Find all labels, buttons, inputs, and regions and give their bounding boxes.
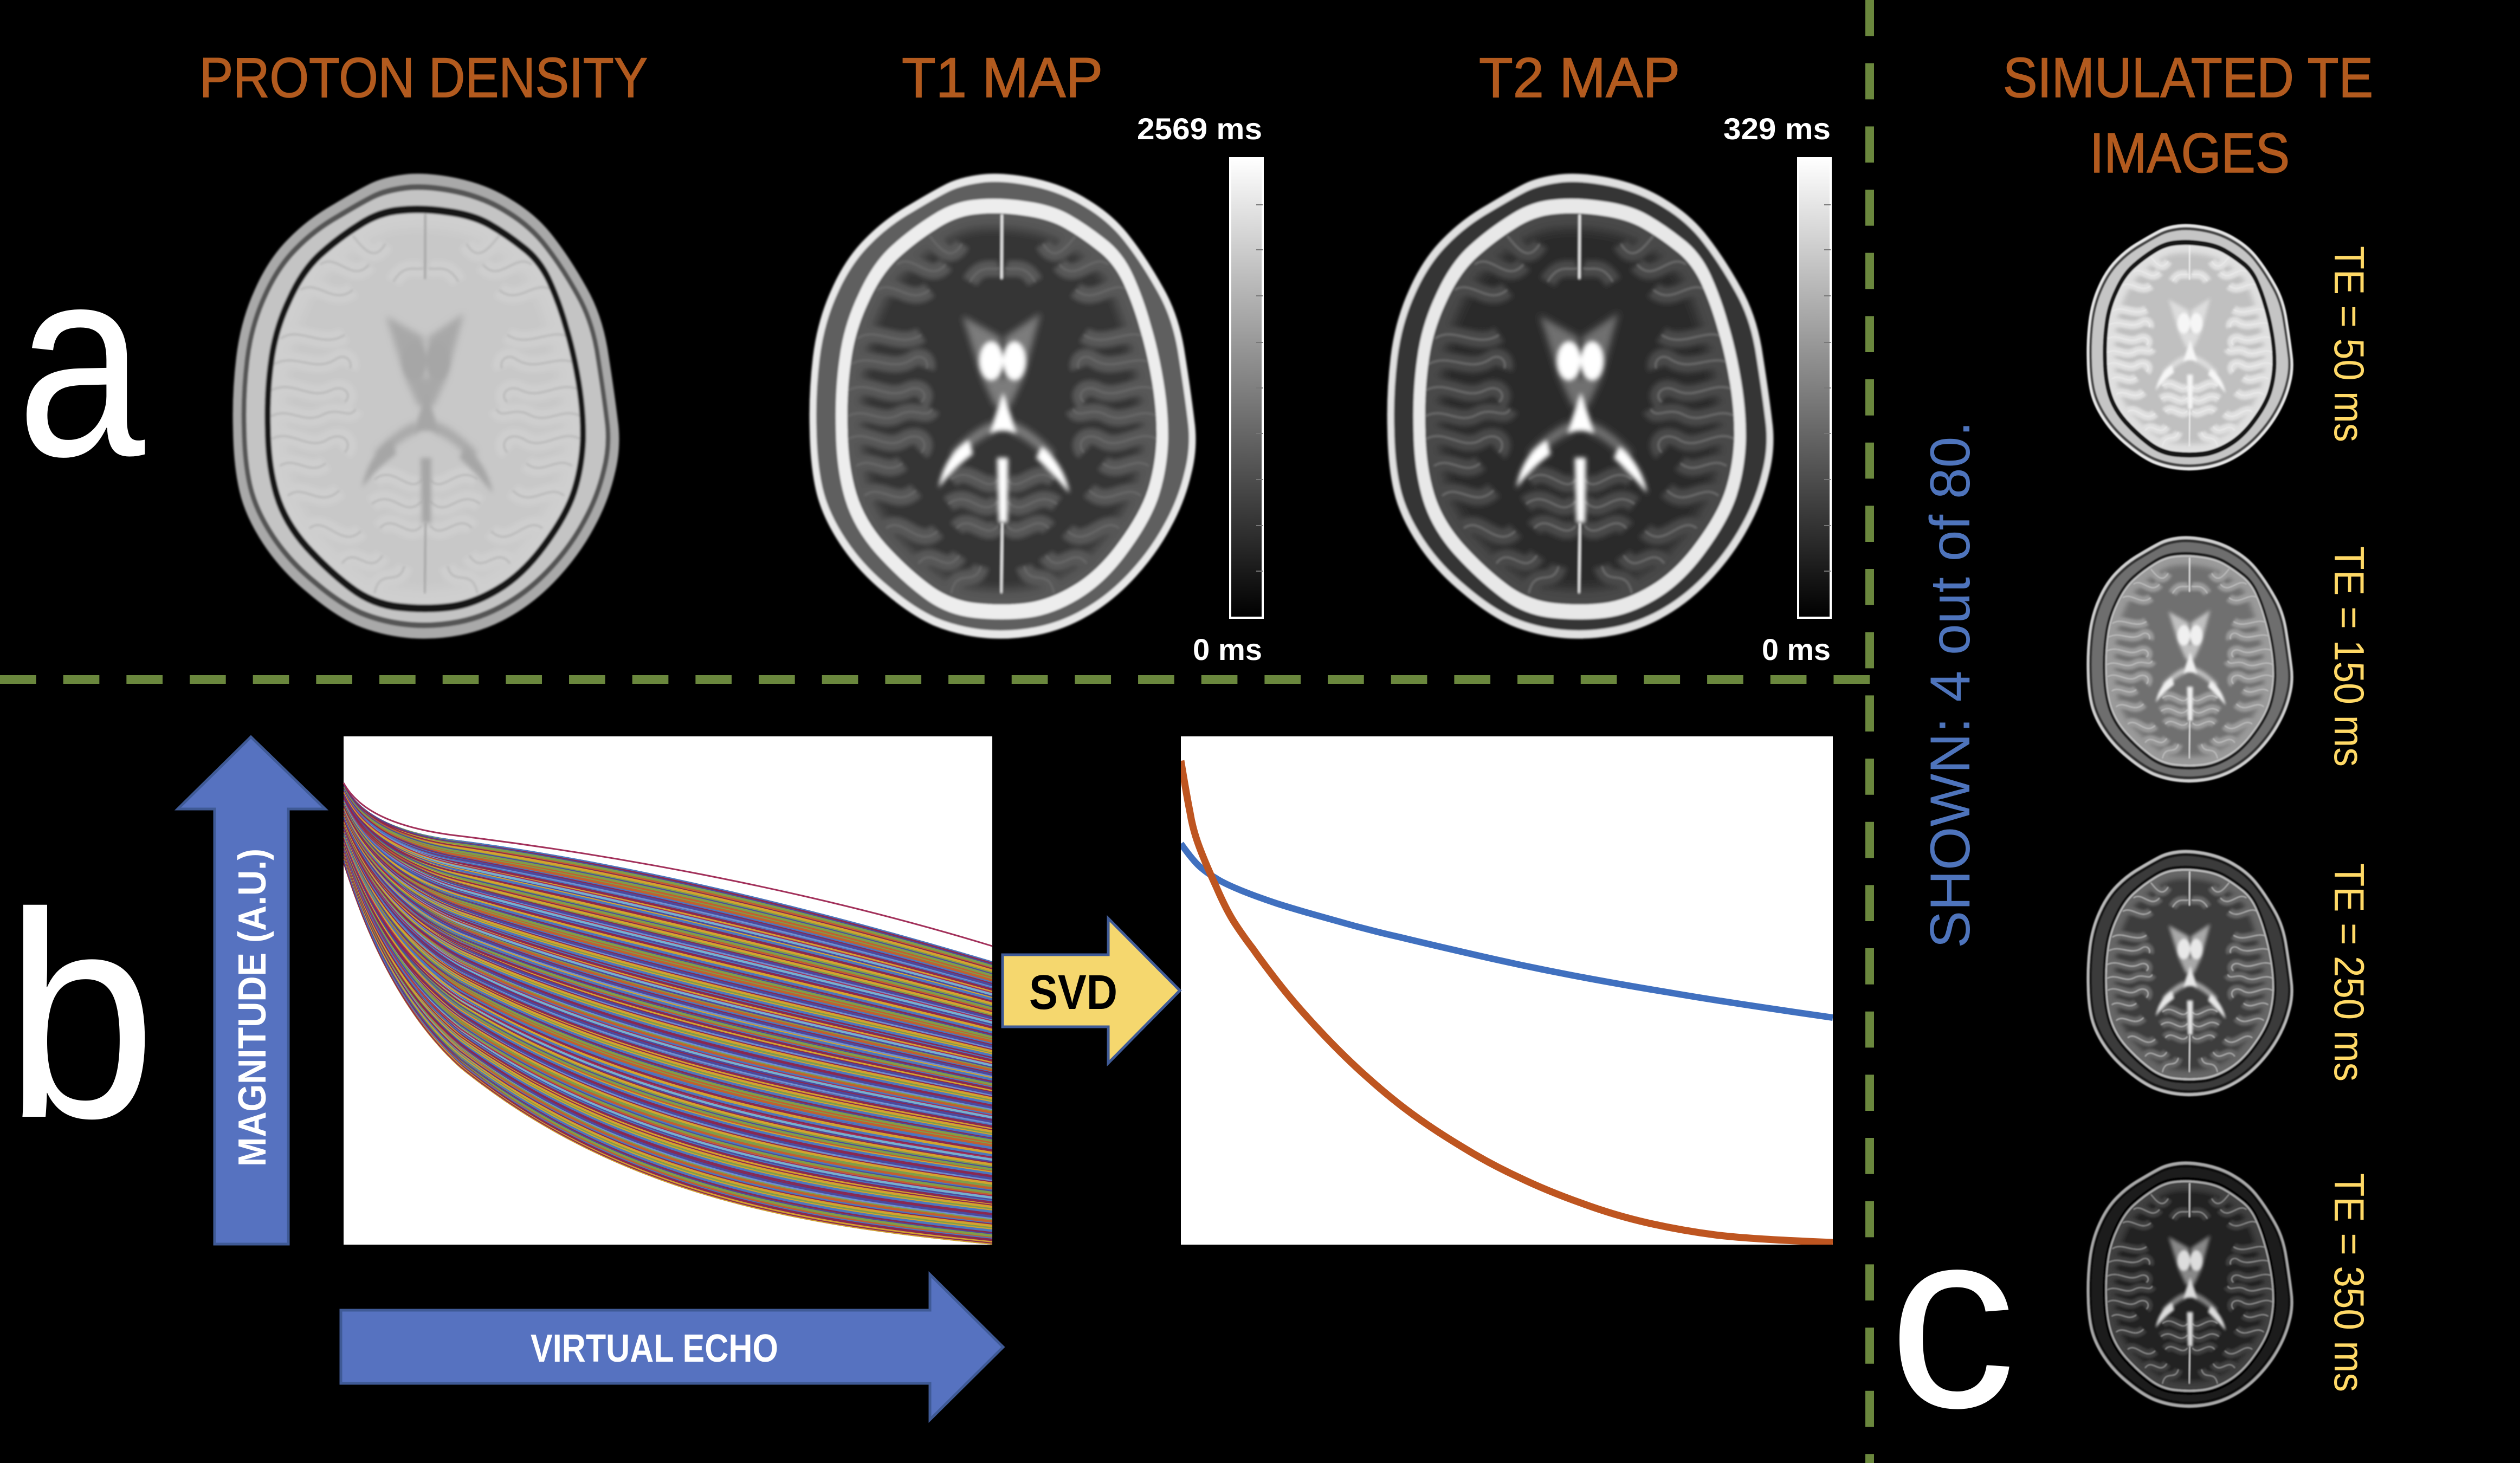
curve bundle — [344, 736, 992, 1247]
label: TE 150: TE = 150 ms — [2325, 546, 2373, 767]
heading: T2 map: T2 MAP — [1479, 47, 1680, 109]
y axis label: MAGNITUDE (A.U.) — [231, 849, 274, 1167]
colorbar max label: T2: 329 ms — [1723, 112, 1831, 146]
outlier curve — [344, 783, 992, 946]
chart: SVD basis curves — [1181, 736, 1833, 1245]
brain image: TE 150 ms — [2086, 536, 2293, 782]
heading: proton density: PROTON DENSITY — [199, 47, 648, 109]
brain image: proton density — [233, 174, 619, 639]
panel letter c: c — [1889, 1176, 2016, 1461]
colorbar max label: T1: 2569 ms — [1137, 112, 1262, 146]
x axis arrow: virtual echo — [341, 1274, 1003, 1420]
label: TE 50: TE = 50 ms — [2325, 246, 2373, 442]
colorbar: T1 — [1230, 158, 1263, 618]
brain image: T1 map — [810, 174, 1196, 639]
y axis arrow: magnitude — [178, 737, 325, 1244]
blue SVD curve — [1181, 844, 1833, 1018]
chart: decay curves — [344, 736, 992, 1247]
arrow: SVD — [1003, 918, 1180, 1063]
brain image: TE 50 ms — [2086, 224, 2293, 470]
heading: simulated TE images: SIMULATED TE — [2003, 47, 2373, 109]
colorbar min label: T2: 0 ms — [1762, 632, 1831, 666]
brain image: T2 map — [1387, 174, 1773, 639]
panel letter a: a — [17, 211, 146, 513]
heading: simulated TE images — [2003, 47, 2373, 185]
note: shown 4 out of 80: SHOWN: 4 out of 80. — [1919, 421, 1982, 948]
colorbar min label: T1: 0 ms — [1193, 632, 1262, 666]
vertical dashed divider — [1865, 0, 1874, 1463]
horizontal dashed divider — [0, 675, 1870, 684]
heading: T1 map: T1 MAP — [902, 47, 1103, 109]
brain image: TE 250 ms — [2086, 850, 2293, 1096]
label: TE 350: TE = 350 ms — [2325, 1173, 2373, 1392]
brain image: TE 350 ms — [2086, 1161, 2293, 1408]
x axis label: VIRTUAL ECHO — [531, 1327, 778, 1370]
arrow label: SVD — [1029, 966, 1117, 1020]
panel letter b: b — [5, 852, 156, 1179]
colorbar: T2 — [1798, 158, 1831, 618]
orange SVD curve — [1181, 761, 1833, 1242]
label: TE 250: TE = 250 ms — [2325, 863, 2373, 1082]
heading: simulated TE images: IMAGES — [2090, 122, 2290, 185]
